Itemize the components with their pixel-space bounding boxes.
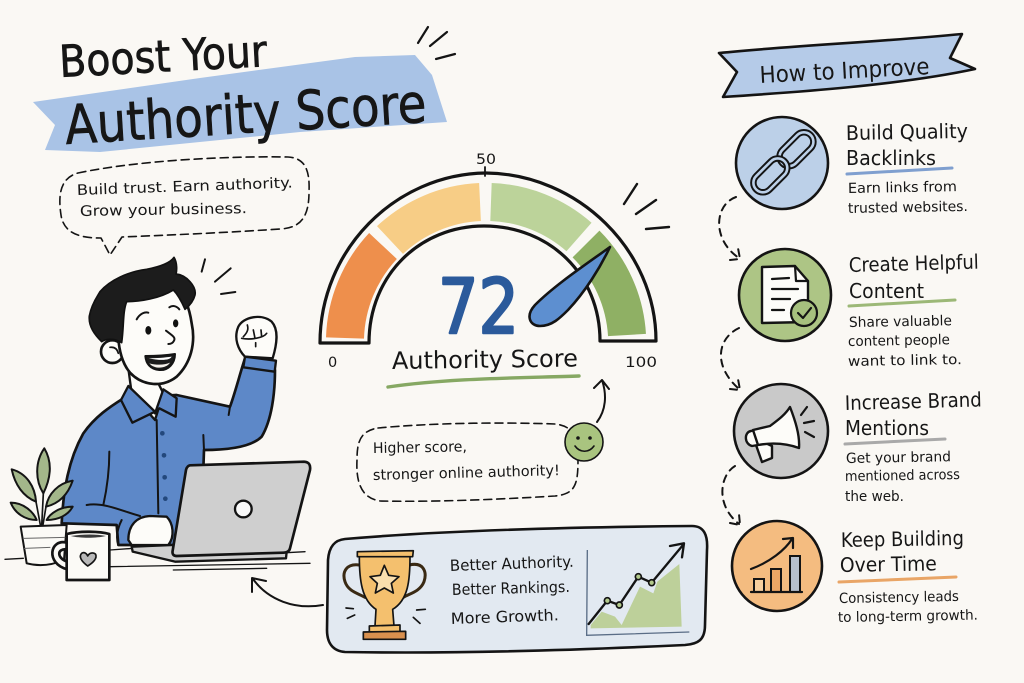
- callout: higher score: [357, 380, 609, 501]
- illustration: person at laptop: [5, 257, 310, 580]
- dashed arrow 1: [719, 197, 740, 260]
- gauge: [320, 152, 669, 387]
- neck: [128, 368, 163, 420]
- chart: growth: [587, 543, 689, 635]
- gauge segment: orange: [345, 246, 383, 338]
- callout text: Higher score,: [373, 439, 467, 457]
- step text: Mentions: [845, 416, 929, 440]
- title line 1: Boost Your: [58, 26, 269, 88]
- step text: Get your brand: [846, 449, 951, 467]
- step: increase brand mentions: [734, 384, 982, 505]
- step text: Consistency leads: [839, 589, 959, 607]
- mouth: [145, 354, 175, 370]
- step text: Build Quality: [846, 119, 968, 145]
- gauge scale labels: 100: [625, 355, 657, 371]
- pot: [21, 525, 67, 565]
- step text: [845, 387, 982, 505]
- how to improve banner: [719, 34, 975, 97]
- icon: smiley: [565, 423, 603, 461]
- icon: chain link: [736, 117, 828, 209]
- gauge segment: dark green: [586, 244, 627, 335]
- step text: Create Helpful: [849, 250, 979, 277]
- step text: Backlinks: [846, 146, 936, 170]
- callout: higher score: stronger online authority!: [373, 463, 560, 484]
- icon: document: [739, 249, 831, 341]
- step text: Content: [849, 279, 924, 303]
- gauge segment: light green: [491, 202, 579, 237]
- step text: [838, 526, 978, 626]
- step text: Share valuable: [849, 313, 952, 331]
- step text: want to link to.: [848, 352, 962, 370]
- step text: [846, 119, 968, 217]
- step text: Increase Brand: [845, 387, 982, 415]
- ear: [101, 340, 124, 363]
- dashed arrow 2: [721, 328, 740, 390]
- step: create helpful content: [739, 249, 979, 370]
- gauge segment: yellow: [390, 202, 480, 240]
- panel text: [450, 553, 574, 628]
- cuff: [243, 357, 276, 372]
- step text: [848, 250, 979, 370]
- title line 2: Authority Score: [63, 72, 428, 157]
- mug: [52, 532, 109, 580]
- speech bubble: Grow your business.: [80, 201, 247, 220]
- gauge score: 72: [438, 262, 519, 351]
- step text: Over Time: [840, 551, 937, 577]
- eyes and brows: [145, 326, 151, 335]
- step text: content people: [848, 332, 950, 350]
- gauge scale labels: [328, 152, 657, 371]
- step text: mentioned across: [845, 467, 960, 485]
- gauge scale labels: 0: [328, 355, 337, 371]
- speech bubble: [60, 157, 309, 255]
- icon: growth bars: [732, 521, 822, 611]
- face: [118, 287, 193, 384]
- step text: trusted websites.: [848, 199, 968, 217]
- title burst: [418, 27, 455, 59]
- gauge needle: [530, 247, 610, 326]
- panel text: More Growth.: [451, 606, 559, 628]
- table line: [5, 548, 310, 570]
- step text: Keep Building: [841, 526, 964, 552]
- step text: to long-term growth.: [838, 608, 978, 626]
- panel text: Better Authority.: [450, 553, 574, 575]
- person burst: [202, 259, 235, 294]
- gauge burst: [624, 184, 669, 229]
- dashed arrow 3: [722, 466, 740, 525]
- arrow to person: [252, 578, 323, 606]
- speech bubble text: Build trust. Earn authority.: [77, 175, 293, 199]
- fist: [236, 317, 277, 358]
- step text: the web.: [845, 489, 904, 505]
- hair: [89, 257, 195, 343]
- panel: benefits: [327, 526, 707, 653]
- gauge scale labels: 50: [476, 152, 496, 168]
- laptop: [128, 462, 310, 562]
- icon: megaphone: [734, 384, 828, 478]
- step text: Earn links from: [848, 179, 957, 197]
- title brush highlight: [33, 55, 447, 152]
- step: build quality backlinks: [736, 117, 968, 217]
- gauge outline: [320, 173, 656, 343]
- shirt details: [87, 358, 275, 545]
- arrow to gauge: [594, 380, 609, 422]
- collar: [121, 386, 177, 423]
- panel text: Better Rankings.: [452, 578, 570, 599]
- banner text: How to Improve: [759, 54, 930, 89]
- step: keep building over time: [732, 521, 978, 626]
- icon: trophy: [344, 551, 425, 639]
- plant: [11, 448, 73, 565]
- title: [33, 26, 455, 157]
- gauge label: Authority Score: [392, 344, 578, 375]
- shirt: [62, 358, 275, 545]
